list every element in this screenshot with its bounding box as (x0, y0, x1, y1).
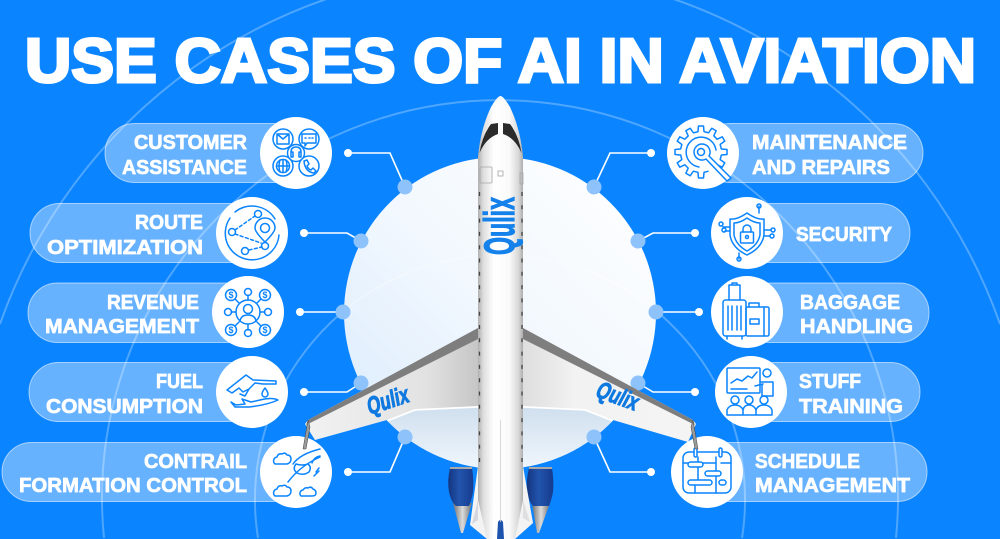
icon: route map pin (225, 206, 279, 260)
logo: left wing: Qulix (365, 381, 411, 421)
connector lines (300, 153, 699, 472)
tail fin (497, 520, 504, 539)
item: schedule management: MANAGEMENT (755, 475, 910, 497)
icon: revenue people network: $ (262, 290, 268, 300)
item: customer assistance: ASSISTANCE (122, 157, 247, 179)
icon: revenue people network: $ (262, 325, 268, 335)
item: fuel consumption: CONSUMPTION (46, 396, 203, 418)
engines (448, 467, 553, 533)
item: baggage handling: HANDLING (800, 316, 913, 338)
item: fuel consumption: FUEL (156, 371, 203, 393)
item: fuel consumption (29, 356, 288, 428)
icon: revenue people network: $ (228, 325, 234, 335)
item: maintenance and repairs (667, 117, 923, 189)
item: security (711, 197, 910, 269)
item: contrail formation control: FORMATION CONTROL (19, 475, 247, 497)
item: customer assistance (105, 117, 332, 189)
item: stuff training (715, 356, 920, 428)
title: USE CASES OF AI IN AVIATION (25, 27, 976, 96)
item: revenue management: MANAGEMENT (45, 316, 199, 338)
logo: fuselage: Qulix (476, 197, 524, 255)
item: customer assistance: CUSTOMER (134, 132, 248, 154)
item: contrail formation control: CONTRAIL (144, 451, 247, 473)
item: stuff training: STUFF (799, 371, 861, 393)
item: route optimization: ROUTE (135, 212, 203, 234)
item: security: SECURITY (796, 224, 893, 246)
connector end dots (296, 149, 703, 476)
item: maintenance and repairs: MAINTENANCE (752, 132, 907, 154)
cockpit windows (480, 123, 522, 153)
item: revenue management (28, 276, 284, 348)
central light disc (344, 157, 656, 469)
airplane (303, 96, 698, 539)
door outlines (480, 167, 523, 522)
icon: revenue people network (224, 288, 272, 336)
icon: calendar schedule (683, 448, 731, 493)
item: route optimization: OPTIMIZATION (47, 237, 203, 259)
fuselage (478, 96, 523, 539)
item: maintenance and repairs: AND REPAIRS (752, 157, 890, 179)
icon: fuel nozzle and plane (227, 375, 278, 407)
item: route optimization (30, 197, 288, 269)
icon: gear and wrench (675, 126, 731, 181)
item: contrail formation control (2, 436, 332, 508)
icon: presenter and audience (727, 368, 773, 415)
icon: revenue people network: $ (228, 290, 234, 300)
logo: right wing: Qulix (591, 377, 645, 416)
tail fairings (470, 466, 533, 539)
item: revenue management: REVENUE (107, 292, 199, 314)
item: baggage handling (711, 276, 929, 348)
icon: clouds and contrails (274, 449, 320, 496)
icon: luggage (723, 283, 769, 339)
cabin windows (480, 192, 522, 470)
anchor dots on disc (336, 180, 664, 444)
right wing (523, 328, 698, 449)
left wing (303, 328, 478, 449)
wing flaps (380, 406, 620, 470)
icon: support headset network (273, 129, 319, 176)
item: schedule management: SCHEDULE (755, 451, 860, 473)
icon: shield with padlock (719, 204, 775, 261)
item: stuff training: TRAINING (799, 396, 903, 418)
item: baggage handling: BAGGAGE (800, 292, 900, 314)
item: schedule management (671, 436, 927, 508)
